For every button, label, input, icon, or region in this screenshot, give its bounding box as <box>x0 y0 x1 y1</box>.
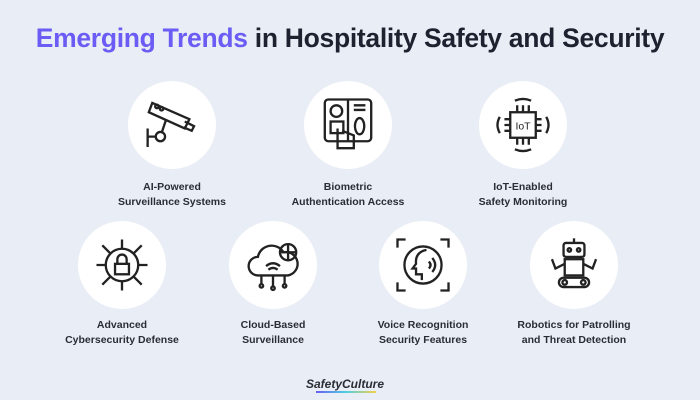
icon: cloud <box>229 221 317 309</box>
label: Cybersecurity Defense <box>65 334 179 346</box>
label: Voice Recognition <box>378 319 468 331</box>
label: IoT-Enabled <box>493 181 553 193</box>
label <box>378 319 468 346</box>
label <box>241 319 305 346</box>
label: Surveillance <box>242 334 304 346</box>
label: Cloud-Based <box>241 319 305 331</box>
label: Robotics for Patrolling <box>517 319 631 331</box>
label: AI-Powered <box>143 181 201 193</box>
label <box>118 181 226 208</box>
label <box>65 319 179 346</box>
icon: cybersecurity <box>78 221 166 309</box>
icon: surveillance camera <box>128 81 216 169</box>
label: Advanced <box>97 319 147 331</box>
label <box>479 181 567 208</box>
label: Authentication Access <box>292 196 404 208</box>
label <box>292 181 404 208</box>
icon: robot <box>530 221 618 309</box>
icon: voice recognition <box>379 221 467 309</box>
icon: IoT chip <box>479 81 567 169</box>
logo: SafetyCulture <box>306 377 384 391</box>
label: Safety Monitoring <box>479 196 567 208</box>
label <box>517 319 631 346</box>
icon: IoT chip: IoT <box>515 122 531 133</box>
label: and Threat Detection <box>522 334 626 346</box>
label: Biometric <box>324 181 372 193</box>
label: Security Features <box>379 334 467 346</box>
title: Emerging Trends in Hospitality Safety and Security <box>36 23 664 53</box>
label: Surveillance Systems <box>118 196 226 208</box>
icon: biometric <box>304 81 392 169</box>
